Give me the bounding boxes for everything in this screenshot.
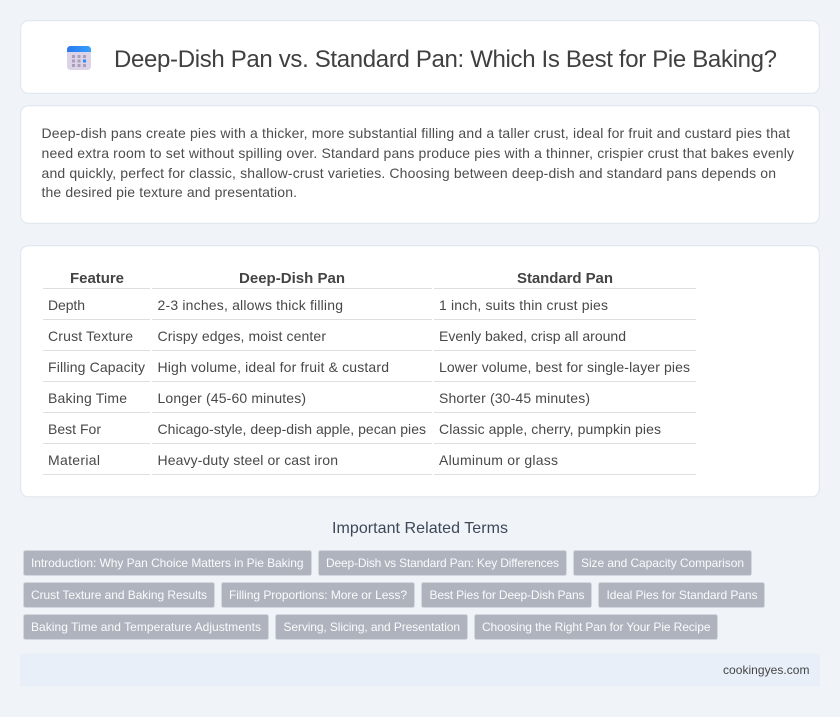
text block: introduction: the desired pie texture and presentation. — [42, 184, 297, 200]
icon: calendar — [67, 46, 91, 70]
table header: Standard Pan — [517, 270, 613, 287]
panel: introduction — [21, 106, 819, 223]
table row: best for: Classic apple, cherry, pumpkin pies — [439, 421, 661, 437]
table row: filling capacity — [48, 359, 690, 375]
tag — [422, 582, 592, 608]
table row: filling capacity: Lower volume, best for single-layer pies — [439, 359, 690, 375]
tag — [276, 614, 468, 640]
tag: Introduction: Why Pan Choice Matters in Pie Baking — [31, 556, 304, 570]
table row: best for: Best For — [48, 421, 101, 437]
panel: comparison table — [21, 246, 819, 497]
table header: Deep-Dish Pan — [239, 270, 345, 287]
table header — [70, 270, 613, 287]
tag — [598, 582, 764, 608]
table row: best for: Chicago-style, deep-dish apple, pecan pies — [158, 421, 426, 437]
footer: source: cookingyes.com — [723, 663, 810, 677]
tag: Filling Proportions: More or Less? — [229, 588, 407, 602]
text block: introduction — [42, 125, 794, 200]
table row: depth: 2-3 inches, allows thick filling — [158, 297, 343, 313]
text block: introduction: need extra room to set without spilling over. Standard pans produce pies with a thinner, crispier crust that bakes evenly — [42, 145, 794, 161]
tag: Crust Texture and Baking Results — [31, 588, 207, 602]
tag — [24, 582, 214, 608]
footer — [20, 654, 820, 686]
title: Deep-Dish Pan vs. Standard Pan: Which Is Best for Pie Baking? — [114, 46, 777, 73]
tag — [24, 614, 268, 640]
tag — [222, 582, 414, 608]
heading: related terms: Important Related Terms — [332, 520, 508, 537]
table row: depth — [48, 297, 608, 313]
tag: Size and Capacity Comparison — [581, 556, 744, 570]
tag: Best Pies for Deep-Dish Pans — [430, 588, 584, 602]
tag: Serving, Slicing, and Presentation — [284, 620, 460, 634]
table row: baking time: Shorter (30-45 minutes) — [439, 390, 590, 406]
tag — [574, 550, 752, 576]
table header: Feature — [70, 270, 124, 287]
tag: Deep-Dish vs Standard Pan: Key Differences — [326, 556, 559, 570]
table row: material — [48, 452, 558, 468]
tag — [318, 550, 566, 576]
table row: depth: 1 inch, suits thin crust pies — [439, 297, 608, 313]
table row: crust texture: Evenly baked, crisp all around — [439, 328, 626, 344]
table row: material: Aluminum or glass — [439, 452, 558, 468]
table row: filling capacity: Filling Capacity — [48, 359, 145, 375]
panel: header — [21, 21, 819, 93]
text block: introduction: Deep-dish pans create pies with a thicker, more substantial filling and a taller crust, ideal for fruit and custard pies that — [42, 125, 790, 141]
table row: crust texture: Crust Texture — [48, 328, 133, 344]
table row: baking time: Baking Time — [48, 390, 127, 406]
table row: material: Heavy-duty steel or cast iron — [158, 452, 338, 468]
table row: material: Material — [48, 452, 100, 468]
tag: Baking Time and Temperature Adjustments — [31, 620, 261, 634]
table row: baking time — [48, 390, 590, 406]
table row: best for — [48, 421, 661, 437]
table row: depth: Depth — [48, 297, 85, 313]
related term tags — [24, 550, 764, 640]
tag: Ideal Pies for Standard Pans — [606, 588, 758, 602]
table row: baking time: Longer (45-60 minutes) — [158, 390, 306, 406]
table row: filling capacity: High volume, ideal for fruit & custard — [158, 359, 389, 375]
tag — [474, 614, 718, 640]
table row: crust texture — [48, 328, 626, 344]
table row: crust texture: Crispy edges, moist center — [158, 328, 326, 344]
tag — [24, 550, 312, 576]
tag: Choosing the Right Pan for Your Pie Recipe — [482, 620, 711, 634]
text block: introduction: and quickly, perfect for classic, shallow-crust varieties. Choosing between deep-dish and standard pans depends on — [42, 165, 776, 181]
